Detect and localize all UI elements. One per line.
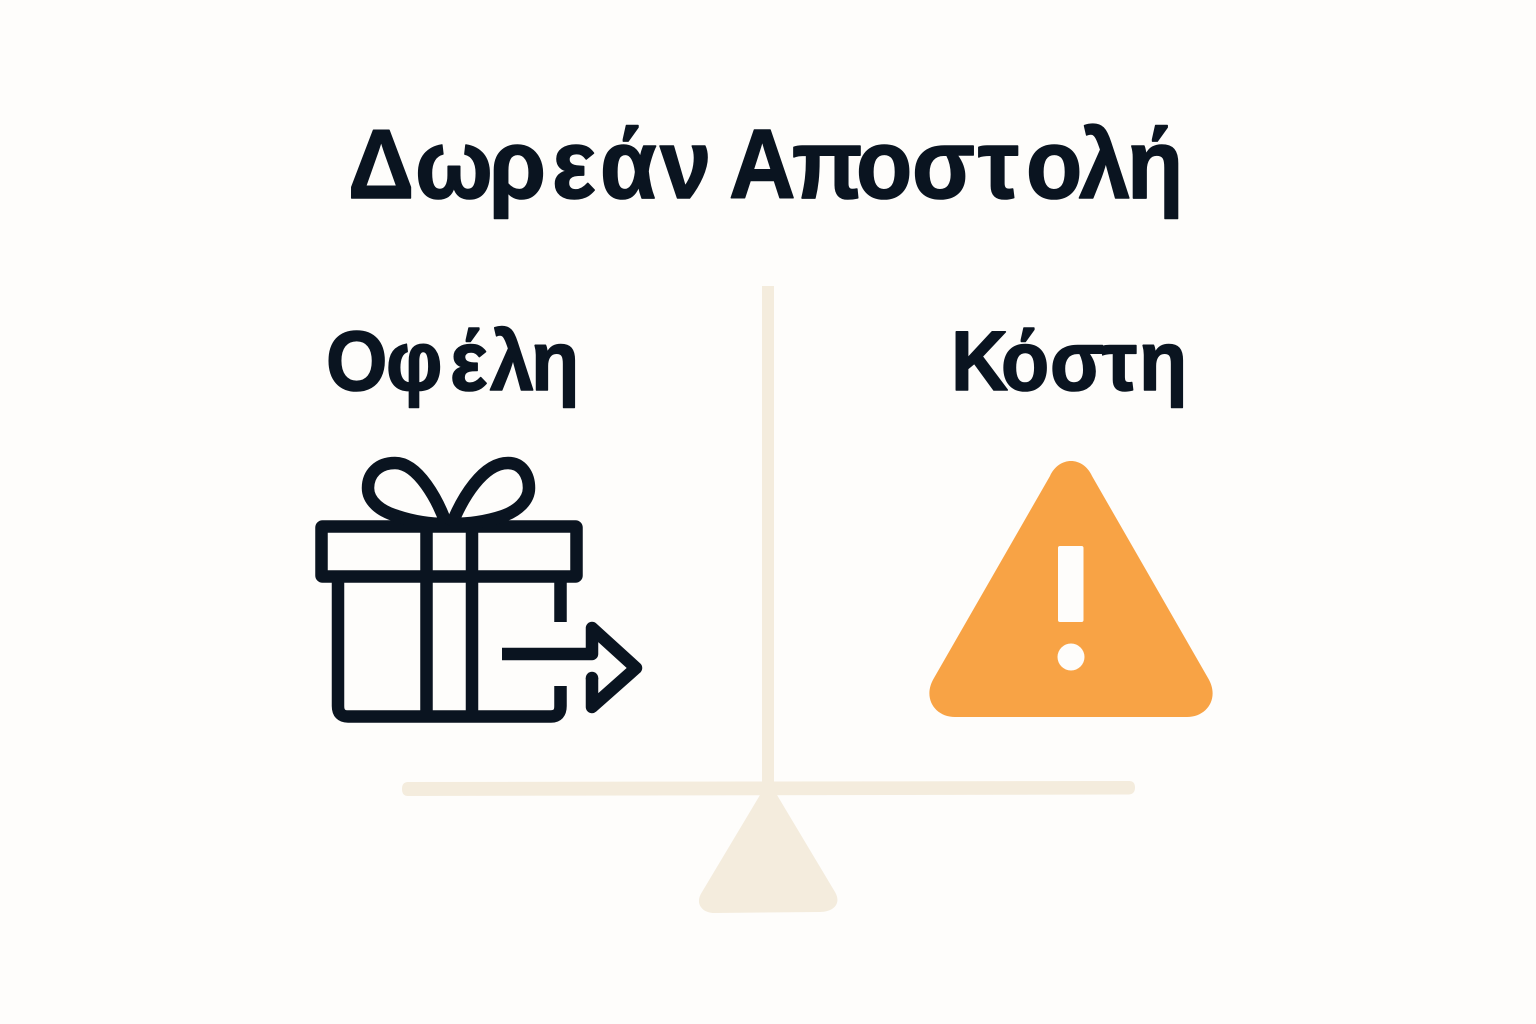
- balance scale: [402, 286, 1135, 913]
- heading: benefits: Οφέλη: [326, 315, 579, 409]
- icon: gift box with arrow: [322, 463, 636, 716]
- title: Δωρεάν Αποστολή: [348, 110, 1183, 220]
- heading: costs: Κόστη: [951, 315, 1187, 409]
- icon: warning triangle: [929, 461, 1213, 717]
